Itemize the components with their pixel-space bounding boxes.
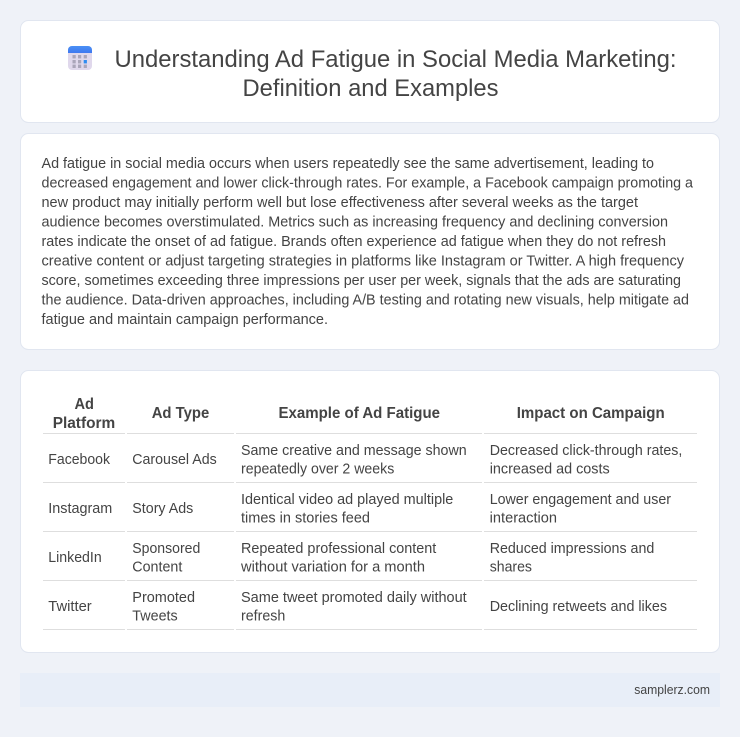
table row: Twitter: refresh (241, 608, 285, 624)
text block: ad fatigue definition: new product may initially perform well but lose effectiveness after several weeks as the target (42, 195, 638, 211)
panel: ad fatigue table (20, 370, 720, 652)
footer bar (20, 673, 720, 707)
table row: Twitter: Declining retweets and likes (490, 599, 667, 615)
table row: Twitter: Same tweet promoted daily without (241, 590, 467, 606)
table row: Twitter (48, 590, 667, 624)
table row: Twitter: Tweets (132, 608, 178, 624)
table row: Facebook (48, 443, 682, 477)
table row: Instagram: times in stories feed (241, 510, 370, 526)
table header row: Example of Ad Fatigue (278, 405, 440, 422)
table row: Twitter: Promoted (132, 590, 195, 606)
table row: LinkedIn: Repeated professional content (241, 541, 436, 557)
table row: LinkedIn: LinkedIn (48, 550, 102, 566)
table row: Instagram: Instagram (48, 501, 112, 517)
table header row: Platform (53, 415, 115, 432)
table row: Instagram: interaction (490, 510, 557, 526)
icon: calendar (68, 46, 92, 70)
text block: ad fatigue definition: decreased engagement and lower click-through rates. For example, a Facebook campaign promoting a (42, 176, 693, 192)
table row: LinkedIn: Sponsored (132, 541, 200, 557)
table row: LinkedIn: Content (132, 559, 182, 575)
table row: Instagram: Lower engagement and user (490, 492, 671, 508)
table row: Facebook: repeatedly over 2 weeks (241, 461, 394, 477)
table row: Instagram: Identical video ad played multiple (241, 492, 453, 508)
text block: ad fatigue definition: the audience. Data-driven approaches, including A/B testing and rotating new visuals, help mitigate ad (42, 292, 689, 308)
table row: Twitter: Twitter (48, 599, 92, 615)
table row: LinkedIn: shares (490, 559, 532, 575)
title: Understanding Ad Fatigue in Social Media Marketing: (114, 46, 676, 73)
table row: LinkedIn (48, 541, 654, 575)
table header row: Ad (74, 396, 94, 413)
text block: ad fatigue definition (42, 156, 693, 328)
title (114, 46, 676, 102)
table row: LinkedIn: without variation for a month (240, 559, 425, 575)
text block: ad fatigue definition: fatigue and maintain campaign performance. (42, 312, 328, 328)
panel: title card (20, 20, 720, 122)
table row: Facebook: Facebook (48, 452, 111, 468)
table row: LinkedIn: Reduced impressions and (490, 541, 654, 557)
text block: ad fatigue definition: Ad fatigue in social media occurs when users repeatedly see the same advertisement, leading to (42, 156, 654, 172)
title: Definition and Examples (242, 75, 498, 102)
table row: Facebook: Carousel Ads (132, 452, 217, 468)
table row: Facebook: Same creative and message shown (241, 443, 467, 459)
text block: ad fatigue definition: score, sometimes exceeding three impressions per user per week, signals that the ads are saturating (42, 273, 681, 289)
table header row (53, 396, 665, 432)
table header row: Ad Type (152, 405, 210, 422)
table row: Instagram: Story Ads (132, 501, 193, 517)
footer bar: samplerz.com (634, 683, 710, 697)
panel: description (20, 134, 720, 350)
text block: ad fatigue definition: creative content or adjust targeting strategies in platforms like Instagram or Twitter. A high frequency (42, 254, 685, 270)
table row: Facebook: Decreased click-through rates, (490, 443, 682, 459)
text block: ad fatigue definition: rates indicate the onset of ad fatigue. Brands often experience ad fatigue when they do not refresh (42, 234, 666, 250)
table row: Instagram (48, 492, 671, 526)
text block: ad fatigue definition: audience becomes overstimulated. Metrics such as increasing frequency and declining conversion (42, 214, 668, 230)
table row: Facebook: increased ad costs (490, 461, 610, 477)
table header row: Impact on Campaign (517, 405, 665, 422)
